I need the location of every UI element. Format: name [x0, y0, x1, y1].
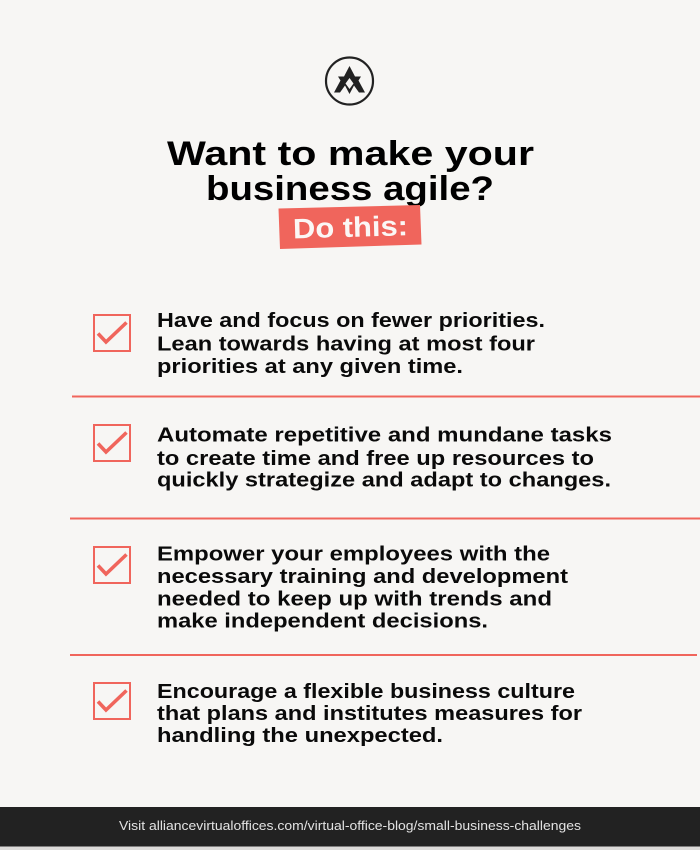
text: encourage: that plans and institutes measures for — [157, 702, 582, 725]
title: business agile? — [206, 170, 494, 208]
text: priorities: Have and focus on fewer priorities. — [157, 309, 545, 332]
text: automate: Automate repetitive and mundane tasks — [157, 424, 612, 447]
item 1 — [94, 309, 545, 378]
text: priorities: priorities at any given time. — [157, 355, 463, 378]
text: automate: to create time and free up resources to — [157, 447, 594, 470]
text: automate: quickly strategize and adapt to changes. — [157, 469, 611, 492]
text: encourage: handling the unexpected. — [157, 724, 443, 747]
text: empower: needed to keep up with trends and — [157, 588, 552, 611]
callout: do this: Do this: — [293, 210, 408, 244]
text: priorities — [157, 309, 545, 378]
item 3 — [94, 543, 568, 633]
icon: logo — [326, 58, 373, 104]
item 2 — [94, 424, 612, 492]
text: empower: Empower your employees with the — [157, 543, 550, 566]
text: encourage — [157, 680, 582, 747]
text: priorities: Lean towards having at most four — [157, 332, 535, 356]
icon: checkbox 4 — [94, 683, 130, 719]
callout: do this — [278, 205, 422, 249]
text: automate — [157, 424, 612, 492]
text: empower: necessary training and development — [157, 565, 568, 588]
item 4 — [94, 680, 582, 747]
icon: checkbox 3 — [94, 547, 130, 583]
icon: checkbox 2 — [94, 425, 130, 461]
text: encourage: Encourage a flexible business culture — [157, 680, 575, 703]
title — [167, 135, 534, 208]
text: empower: make independent decisions. — [157, 610, 488, 633]
footer link text: Visit alliancevirtualoffices.com/virtual-office-blog/small-business-challenges — [119, 819, 581, 833]
text: empower — [157, 543, 568, 633]
footer bar — [0, 807, 700, 850]
title: Want to make your — [167, 135, 534, 173]
icon: checkbox 1 — [94, 315, 130, 351]
